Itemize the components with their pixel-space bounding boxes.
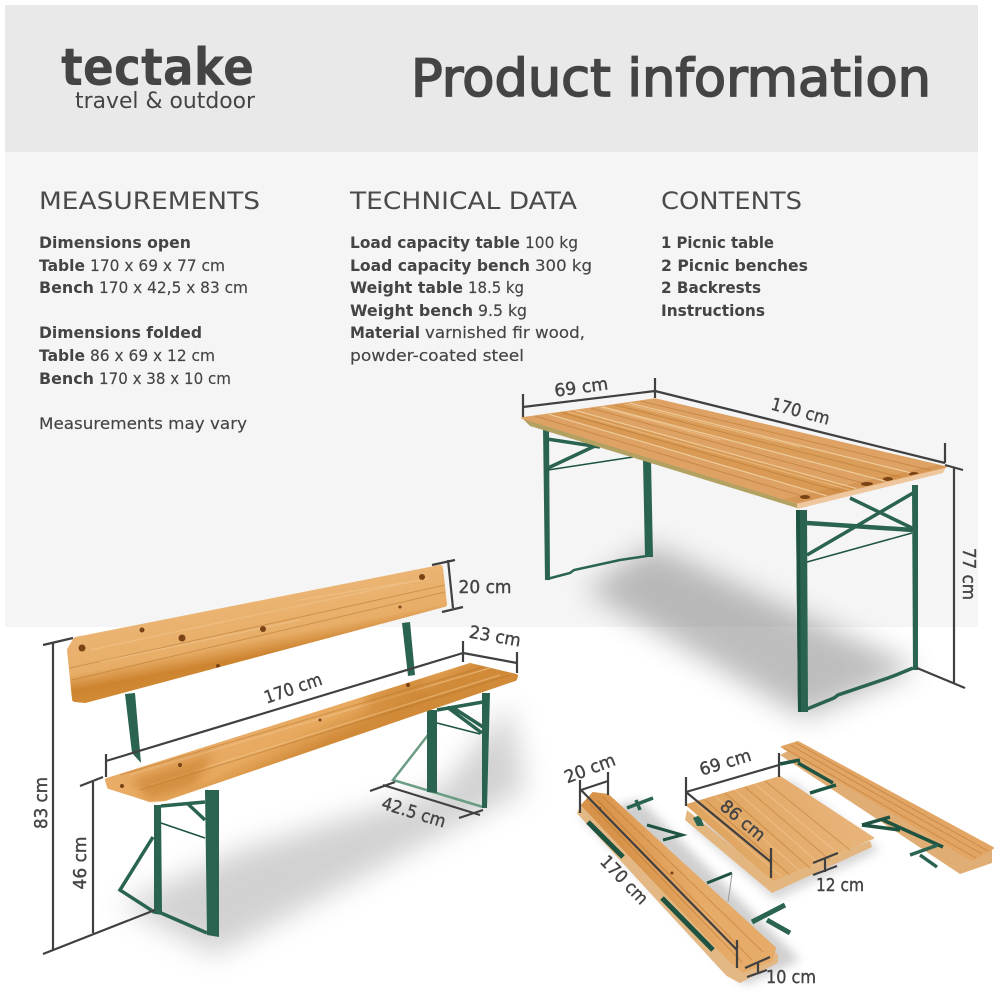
text block: technical data: TECHNICAL DATA xyxy=(349,187,578,215)
text block: contents: Instructions xyxy=(661,301,765,320)
text block: contents: 1 Picnic table xyxy=(661,233,774,252)
text block: measurements: MEASUREMENTS xyxy=(39,187,260,215)
folded bench left xyxy=(578,793,790,982)
label: seat height: 46 cm xyxy=(71,836,91,890)
label: leg width: 42.5 cm xyxy=(379,794,448,832)
label: folded table height: 12 cm xyxy=(816,876,864,896)
illustration: open table xyxy=(522,399,960,718)
bench front legs xyxy=(120,790,219,937)
backrest supports xyxy=(125,622,415,763)
seat xyxy=(107,665,516,800)
table front leg frame xyxy=(796,485,918,712)
panel: header band xyxy=(5,5,978,152)
label: backrest height: 20 cm xyxy=(458,578,512,598)
text block: contents xyxy=(661,187,808,320)
text block: measurements: Dimensions folded xyxy=(39,323,202,342)
label: bench height: 83 cm xyxy=(32,777,52,829)
label: seat depth: 23 cm xyxy=(468,623,522,651)
text block: technical data xyxy=(349,187,592,365)
title: Product information xyxy=(411,49,931,109)
label: folded bench height: 10 cm xyxy=(766,968,816,988)
text block: measurements: Bench xyxy=(39,278,94,297)
text block: contents: 2 Picnic benches xyxy=(661,256,808,275)
text block: measurements xyxy=(39,187,260,433)
text block: technical data: Load capacity table xyxy=(350,233,520,252)
label: table height: 77 cm xyxy=(958,548,978,600)
backrest xyxy=(70,568,445,700)
folded shadow xyxy=(580,800,800,985)
label: bench length: 170 cm xyxy=(262,670,325,708)
dimension lines: bench xyxy=(43,560,517,954)
panel: body background xyxy=(5,152,978,627)
text block: technical data: 9.5 kg xyxy=(478,301,527,320)
text block: technical data: Weight bench xyxy=(350,301,473,320)
text block: measurements: Dimensions open xyxy=(39,233,191,252)
illustration: folded parts xyxy=(578,742,993,985)
text block: technical data: Material xyxy=(350,323,420,342)
table top xyxy=(522,399,960,509)
text block: technical data: 18.5 kg xyxy=(468,278,524,297)
text block: measurements: 170 x 69 x 77 cm xyxy=(90,256,225,275)
table shadow xyxy=(585,545,918,718)
text block: technical data: Load capacity bench xyxy=(350,256,530,275)
label: folded table width: 69 cm xyxy=(697,746,754,781)
bench shadow xyxy=(120,705,525,955)
text block: measurements: Measurements may vary xyxy=(39,414,247,433)
label: table width: 69 cm xyxy=(553,374,609,402)
text block: technical data: 300 kg xyxy=(535,256,592,275)
illustration: bench xyxy=(70,568,525,955)
text block: technical data: varnished fir wood, xyxy=(425,323,585,342)
text block: contents: 2 Backrests xyxy=(661,278,761,297)
label: folded bench width: 20 cm xyxy=(562,750,619,788)
folded shadow right xyxy=(690,780,880,900)
label: folded table length: 86 cm xyxy=(715,796,769,846)
text block: contents: CONTENTS xyxy=(661,187,802,215)
logo: tectake travel & outdoor: travel & outdoor xyxy=(75,89,256,114)
text block: technical data: powder-coated steel xyxy=(350,346,524,365)
text block: measurements: 170 x 42,5 x 83 cm xyxy=(99,278,248,297)
table rear leg frame xyxy=(543,427,653,580)
text block: measurements: Table xyxy=(39,256,85,275)
text block: measurements: Table xyxy=(39,346,85,365)
text block: measurements: Bench xyxy=(39,369,94,388)
dimension lines: table xyxy=(523,378,965,688)
text block: measurements: 86 x 69 x 12 cm xyxy=(90,346,215,365)
dimension lines: folded xyxy=(580,753,838,977)
bench rear legs xyxy=(393,693,490,808)
folded bench right xyxy=(780,742,993,874)
folded table centre xyxy=(685,777,873,893)
text block: technical data: 100 kg xyxy=(525,233,578,252)
logo: tectake travel & outdoor: tectake xyxy=(61,38,254,98)
label: table length: 170 cm xyxy=(769,395,832,430)
text block: measurements: 170 x 38 x 10 cm xyxy=(99,369,231,388)
label: folded bench length: 170 cm xyxy=(596,852,652,909)
text block: technical data: Weight table xyxy=(350,278,463,297)
